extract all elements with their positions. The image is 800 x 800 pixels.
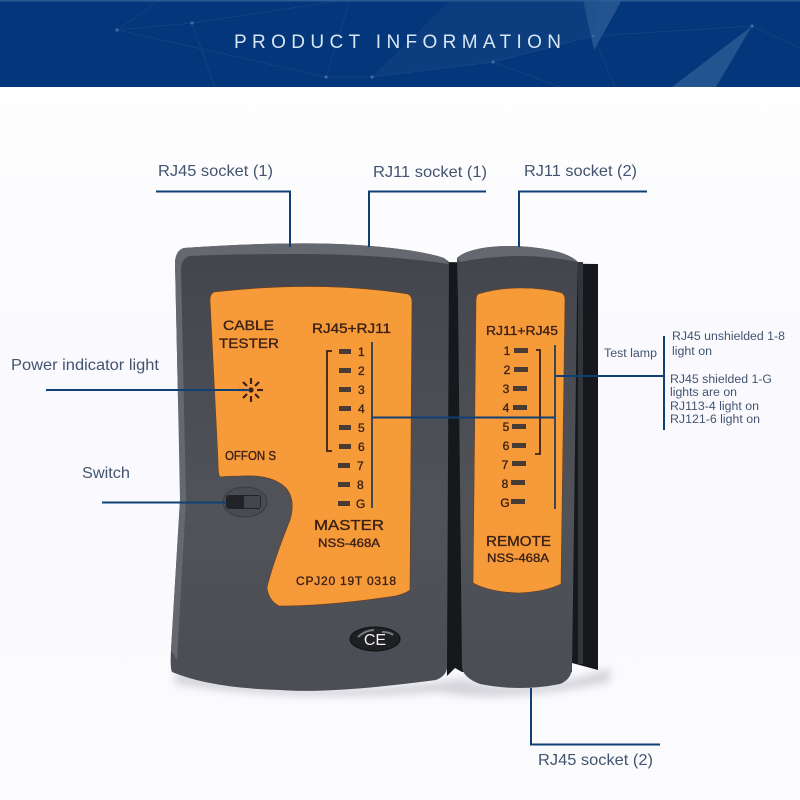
orange panel: master xyxy=(210,286,412,606)
icon: power indicator sunburst xyxy=(239,378,263,402)
remote model label: NSS-468A xyxy=(487,551,549,565)
remote LED column: 3 xyxy=(503,382,510,396)
master LED column: 7 xyxy=(357,459,364,473)
remote LED column: 2 xyxy=(504,363,511,377)
master LED column: 3 xyxy=(358,383,365,397)
remote LED column: G xyxy=(500,496,510,510)
master LED column: G xyxy=(356,497,365,511)
callout: RJ45 socket (2) xyxy=(531,688,660,769)
callout: RJ11 socket (2): RJ11 socket (2) xyxy=(524,163,637,180)
CE mark: CE xyxy=(364,632,386,649)
test lamp notes xyxy=(670,331,785,426)
test lamp notes: RJ121-6 light on xyxy=(670,414,760,426)
callout: power indicator light: Power indicator light xyxy=(11,357,160,374)
remote label: REMOTE xyxy=(486,534,551,550)
remote LED column: 4 xyxy=(503,401,510,415)
vertical bars on panels xyxy=(372,342,555,509)
callout: switch: Switch xyxy=(82,465,130,482)
CE mark xyxy=(350,627,400,651)
panel text: off on switch: OFFON S xyxy=(225,449,276,463)
device shadow xyxy=(175,668,610,697)
panel text: cable tester: CABLE xyxy=(223,317,274,333)
remote LED column: 6 xyxy=(503,439,510,453)
master LED column: 8 xyxy=(357,478,364,492)
batch code: CPJ20 19T 0318 xyxy=(296,574,396,588)
remote LED column: 7 xyxy=(502,458,509,472)
callout: test lamp connector: Test lamp xyxy=(604,348,657,360)
remote LED column: 8 xyxy=(502,477,509,491)
panel text: RJ11+RJ45: RJ11+RJ45 xyxy=(486,323,558,338)
master LED column xyxy=(327,345,365,511)
device: master unit xyxy=(171,243,449,691)
callout: RJ11 socket (1) xyxy=(369,164,487,247)
model label: NSS-468A xyxy=(318,536,380,550)
remote LED column: 1 xyxy=(504,344,511,358)
callout: RJ45 socket (1) xyxy=(156,163,290,247)
test lamp notes: lights are on xyxy=(670,387,737,399)
panel text: cable tester: TESTER xyxy=(219,335,279,351)
callout: RJ45 socket (2): RJ45 socket (2) xyxy=(538,752,653,769)
master LED column: 4 xyxy=(358,402,365,416)
remote LED column: 5 xyxy=(503,420,510,434)
test lamp notes: RJ113-4 light on xyxy=(670,401,759,413)
master LED column: 2 xyxy=(358,364,365,378)
device: remote unit xyxy=(457,246,578,688)
master LED column: 5 xyxy=(358,421,365,435)
callout: RJ45 socket (1): RJ45 socket (1) xyxy=(158,163,273,180)
title: PRODUCT INFORMATION xyxy=(234,32,561,53)
master label: MASTER xyxy=(314,517,384,534)
switch xyxy=(223,487,267,517)
remote rear fins xyxy=(440,262,598,676)
panel text: cable tester xyxy=(219,317,279,351)
test lamp notes: light on xyxy=(672,346,712,358)
test lamp notes: RJ45 shielded 1-G xyxy=(670,374,772,386)
remote LED column xyxy=(500,344,540,510)
orange panel: remote xyxy=(473,288,565,593)
header banner xyxy=(0,0,800,87)
panel text: RJ45+RJ11: RJ45+RJ11 xyxy=(312,320,391,336)
master LED column: 6 xyxy=(358,440,365,454)
test lamp notes: RJ45 unshielded 1-8 xyxy=(672,331,785,343)
callout: RJ11 socket (2) xyxy=(519,163,647,247)
callout: RJ11 socket (1): RJ11 socket (1) xyxy=(373,164,487,181)
master LED column: 1 xyxy=(358,345,365,359)
